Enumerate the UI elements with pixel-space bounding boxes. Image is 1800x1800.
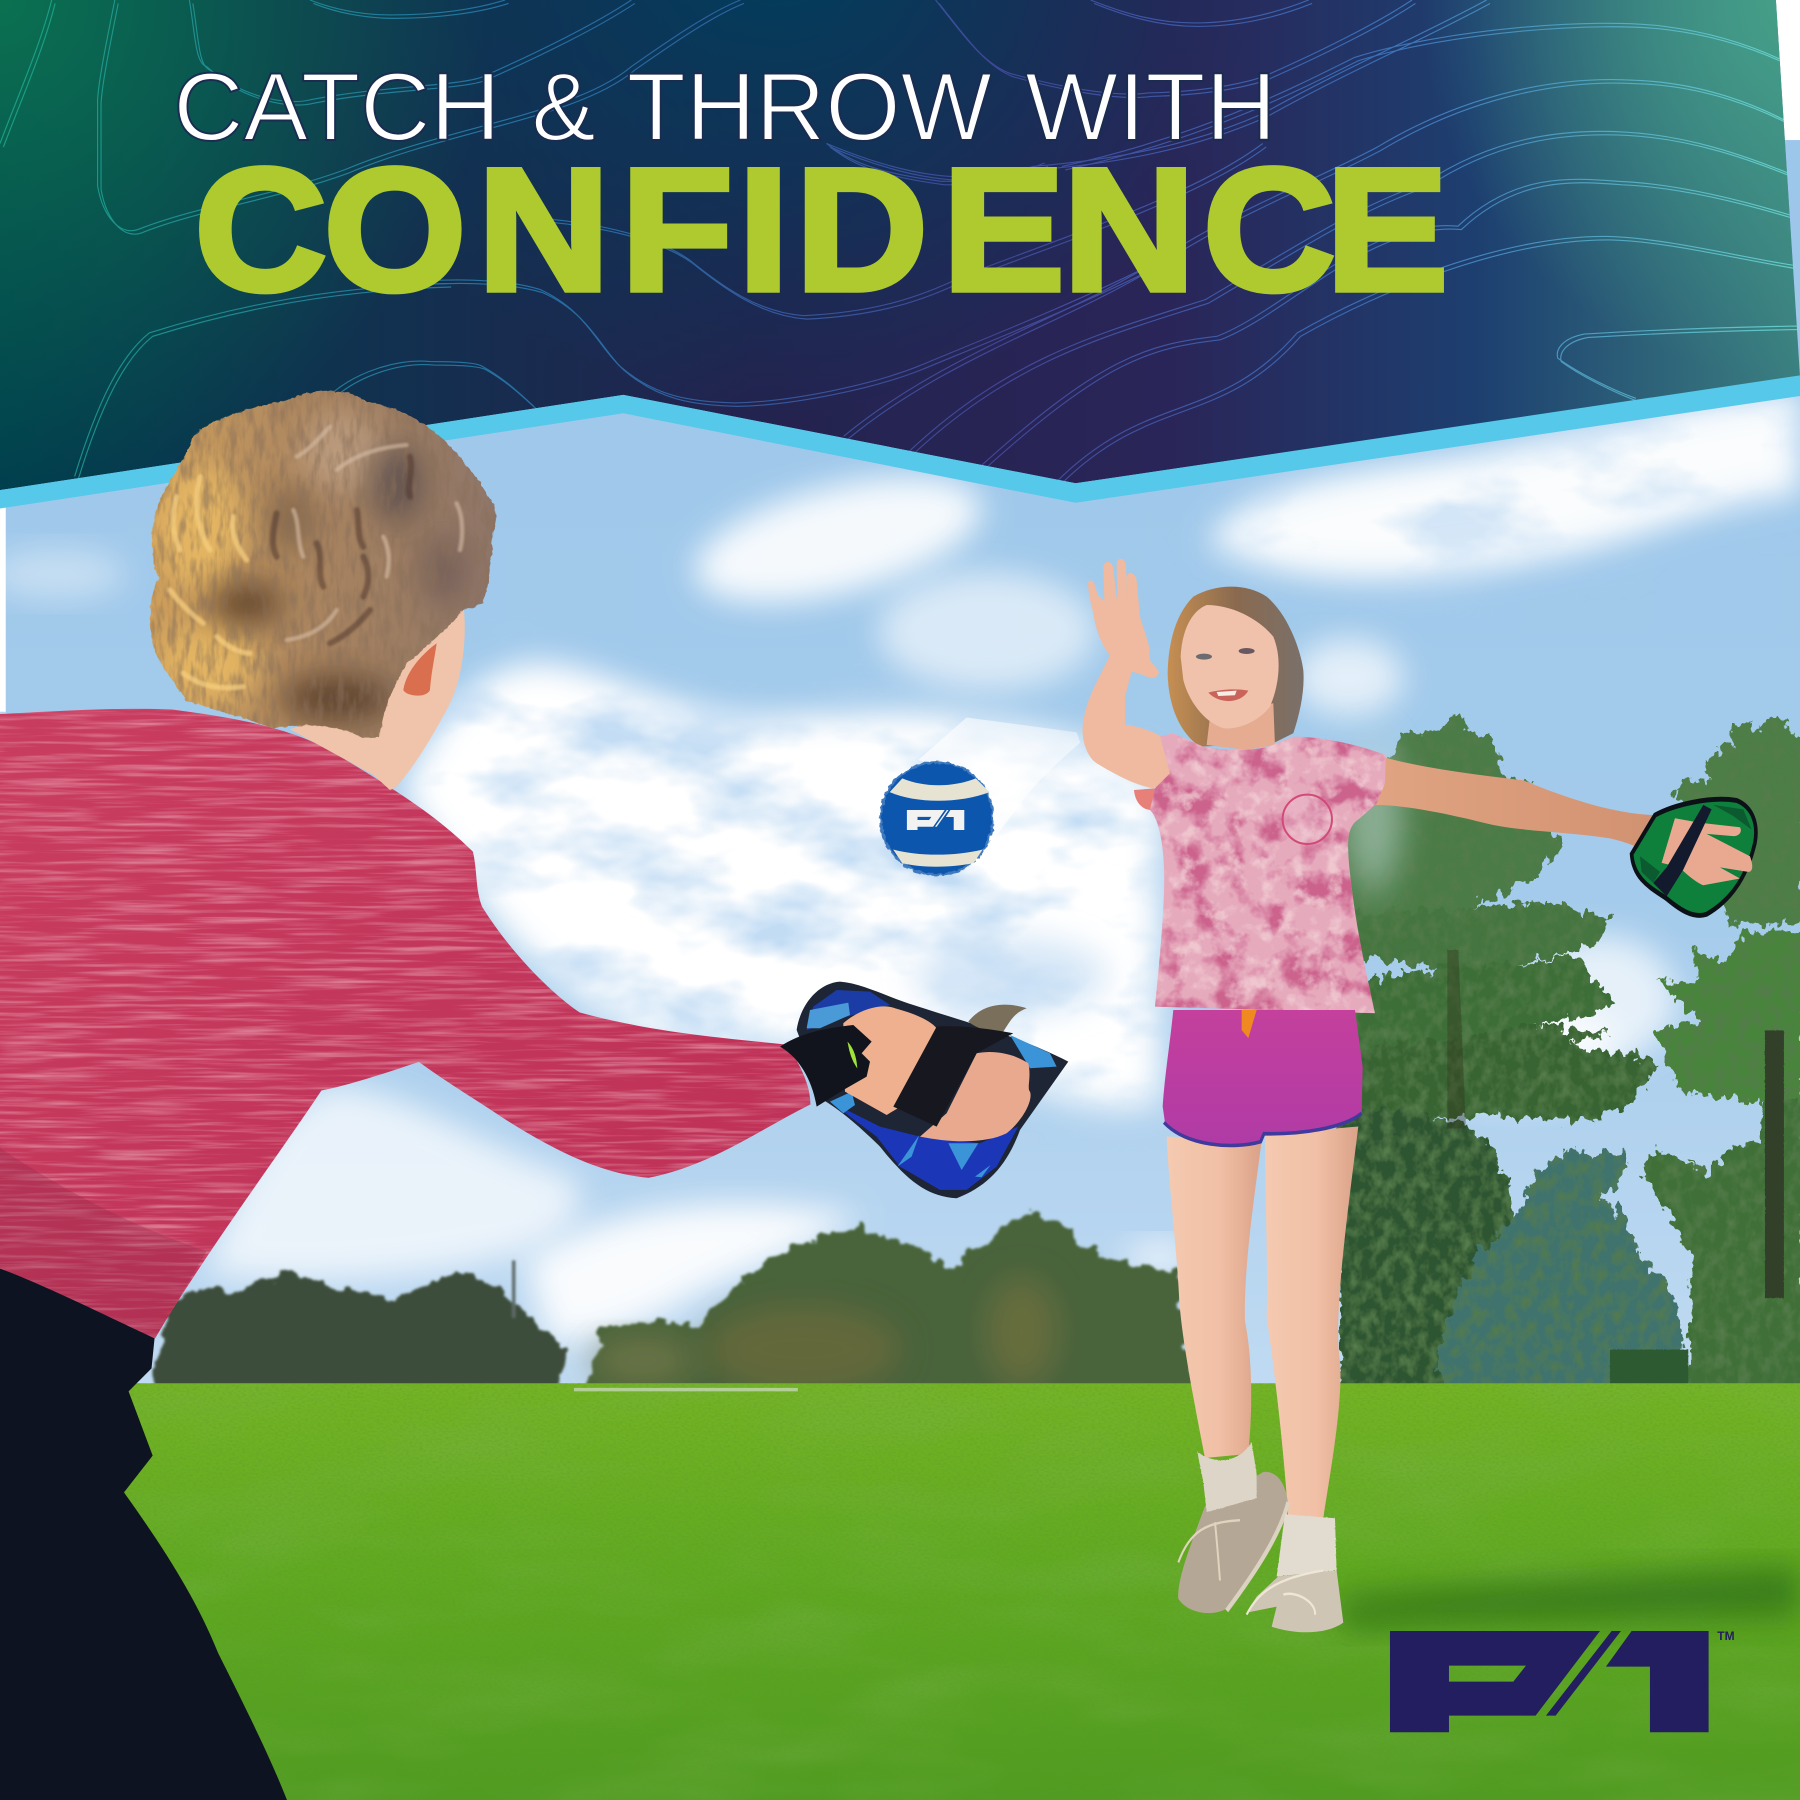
- girl: right sock and shoe: [1247, 1514, 1343, 1632]
- girl: hair: [1168, 587, 1304, 747]
- girl: tie-dye t-shirt: [1150, 733, 1386, 1014]
- paddle: fur tab: [968, 1005, 1027, 1032]
- paddle: lower blue face: [830, 1102, 1018, 1190]
- light blue chevron band: [0, 375, 1800, 509]
- girl: left sock and shoe: [1178, 1442, 1288, 1613]
- girl: face: [1181, 605, 1279, 728]
- boy: ear: [403, 643, 437, 696]
- fingers: [920, 1052, 1031, 1141]
- girl with tie-dye shirt: [1083, 559, 1756, 1632]
- girl: upper body, hair and raised hand: [1083, 559, 1390, 1020]
- girl: legs, shorts and shoes: [1163, 1010, 1363, 1632]
- girl: outstretched arm and green paddle: [1373, 757, 1756, 915]
- ball logo: [907, 810, 964, 830]
- sky with clouds: [0, 140, 1800, 1401]
- title: catch & throw with: &: [532, 54, 596, 161]
- strap: [893, 1026, 1013, 1127]
- P1 logo: [1390, 1629, 1735, 1732]
- girl: eyes and smile: [1196, 648, 1255, 701]
- girl: magenta shorts: [1163, 1010, 1363, 1146]
- ball motion trail: [918, 717, 1080, 840]
- title: catch & throw with: THROW: [627, 54, 992, 161]
- header banner with contour lines: [0, 0, 1800, 490]
- girl: neck: [1207, 703, 1275, 750]
- girl: raised arm and hand: [1083, 559, 1170, 788]
- boy: black pants: [0, 1268, 287, 1800]
- paddle: light panel: [807, 1003, 850, 1028]
- grass field: [0, 1383, 1800, 1800]
- wristband logo: [848, 1043, 857, 1067]
- title: confidence: CONFIDENCE: [195, 132, 1448, 327]
- hand: [843, 1006, 937, 1115]
- blue spruce tree: [1440, 1151, 1688, 1432]
- boy: head: [143, 383, 503, 790]
- paddle: upper blue face: [807, 990, 890, 1030]
- paddle body: [797, 982, 1068, 1198]
- P1 logo: TM: [1717, 1629, 1735, 1643]
- boy with red shirt and blue paddle: [0, 383, 1068, 1800]
- boy: curly blond hair: [143, 383, 503, 743]
- drawstring: [1242, 1010, 1257, 1038]
- pine tree: right: [1643, 713, 1800, 1432]
- pine tree: left: [1340, 716, 1662, 1432]
- title: catch & throw with: WITH: [1025, 54, 1277, 161]
- tall pine trees on the right: [1340, 713, 1800, 1432]
- girl: legs: [1167, 1126, 1358, 1518]
- girl: sleeve lining: [1134, 788, 1157, 810]
- distant tree line: [149, 1208, 1194, 1395]
- title: catch & throw with: CATCH: [173, 54, 501, 161]
- boy: textured red shirt: [0, 700, 821, 1343]
- tennis ball with P1 logo: [880, 762, 993, 875]
- boy: neck: [290, 603, 465, 790]
- boy: blue paddle, hand and wristband: [780, 982, 1068, 1198]
- wristband: [780, 1025, 872, 1107]
- paddle: accents: [830, 1035, 1057, 1177]
- shorts hem: [1164, 1113, 1362, 1145]
